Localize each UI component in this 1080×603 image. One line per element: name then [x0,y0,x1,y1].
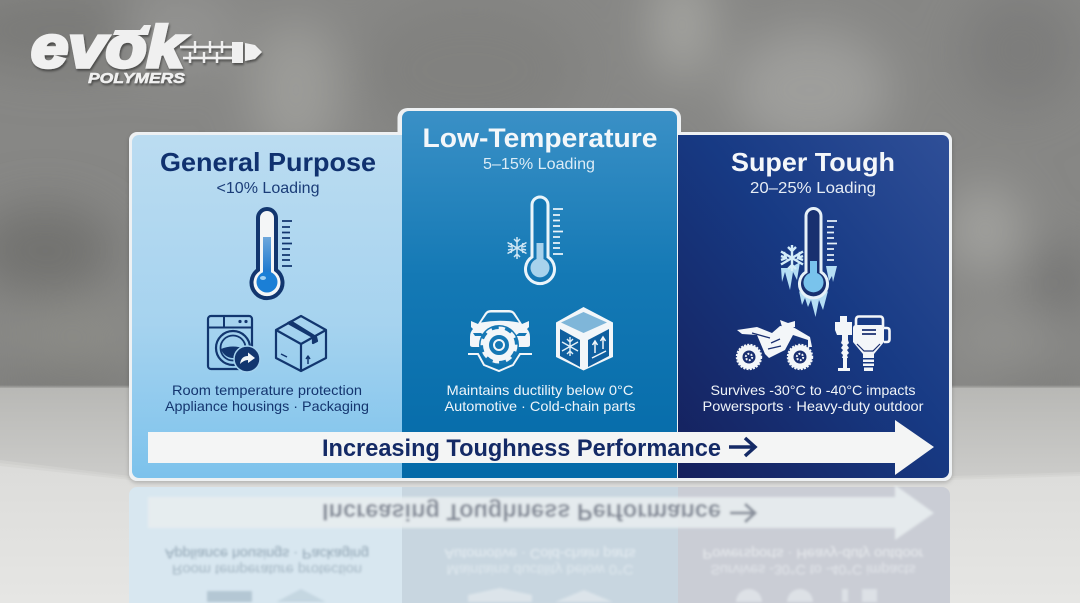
logo macron [113,25,151,35]
heading: Super Tough [731,147,895,177]
card frame [129,132,952,481]
arrow: increasing toughness performance [148,420,934,475]
description [444,382,636,414]
reflected arrow and text: Survives -30°C to -40°C impacts [710,562,916,578]
logo: evok polymers [31,15,262,87]
reflected arrow and text: Powersports · Heavy-duty outdoor [702,546,924,562]
logo bullet tip [232,42,262,63]
description [702,382,924,414]
icon: washing machine [208,316,260,372]
reflected arrow and text [148,485,934,602]
icon: small arrow [729,438,755,456]
description: Survives -30°C to -40°C impacts [710,382,916,398]
reflected icons [207,588,877,602]
logo: evok polymers: evok [31,15,187,80]
panel: general purpose [132,135,402,478]
loading: 20–25% Loading [750,180,876,197]
reflected arrow and text: Increasing Toughness Performance [322,498,721,525]
description: Automotive · Cold-chain parts [444,398,636,414]
heading: General Purpose [160,147,376,177]
icon: ATV [737,320,812,369]
arrow: increasing toughness performance: Increasing Toughness Performance [322,435,721,462]
description: Appliance housings · Packaging [165,398,369,414]
icon: thermometer with snowflake [508,197,563,284]
heading: Low-Temperature [422,123,658,153]
panel: super tough [678,135,949,478]
icon: thermometer [252,209,292,298]
reflected panels [129,487,950,603]
description: Room temperature protection [172,382,362,398]
reflected arrow and text: Automotive · Cold-chain parts [444,546,636,562]
icon: cardboard box [276,316,326,371]
icon: frozen thermometer [781,209,837,317]
loading: 5–15% Loading [483,156,595,173]
icon: cold-chain crate [556,307,613,370]
logo: evok polymers: POLYMERS [88,70,185,87]
description: Powersports · Heavy-duty outdoor [702,398,924,414]
reflection of the card on the floor [129,485,950,603]
description: Maintains ductility below 0°C [446,382,634,398]
icon: jackhammer [835,316,890,371]
loading: <10% Loading [216,180,320,197]
infographic card [129,108,952,481]
reflected arrow and text: Maintains ductility below 0°C [446,562,634,578]
description [165,382,369,414]
icon: car with gear [468,310,532,371]
panel: low-temperature [398,108,681,478]
reflected arrow and text: Room temperature protection [172,562,362,578]
reflected arrow and text: Appliance housings · Packaging [165,546,369,562]
logo bullet barbs [180,41,232,63]
